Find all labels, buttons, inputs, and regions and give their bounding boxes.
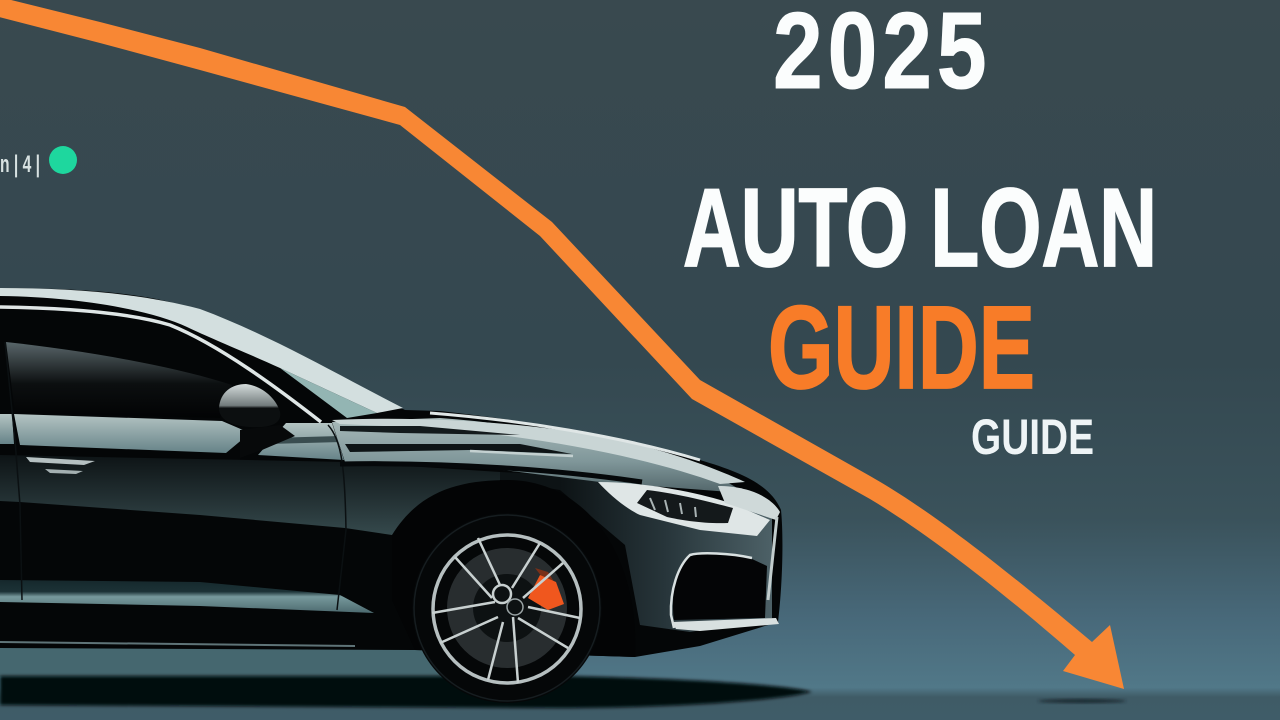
bumper air intake [671,517,779,631]
window chrome line [0,307,321,422]
spokes [432,538,580,683]
headlight [598,482,770,536]
rocker trim line [0,642,355,646]
brake disc [447,548,567,668]
side mirror [219,384,295,458]
hub [493,585,511,603]
front fender highlight [718,486,780,520]
door handle [26,457,95,474]
floor band visible under the car [0,645,440,677]
lower sill reflection [0,580,374,613]
small repeated guide label: GUIDE [971,409,1094,465]
roof highlight [0,288,403,413]
door seams [5,342,346,610]
side window glass [6,342,232,418]
door panel reflection [0,455,500,535]
title: guide in orange: GUIDE [768,282,1035,414]
front fender panel [500,472,772,632]
hood and shoulder reflections [332,413,775,510]
small ticker glyphs and green status dot: n | 4 | [0,151,40,178]
car body silhouette [0,288,782,657]
tire [412,513,602,703]
windshield sliver [280,368,377,418]
belt line reflection panels [14,414,250,453]
alloy rim [433,535,581,683]
small ticker glyphs and green status dot [0,146,77,178]
wheel arch [392,480,635,657]
floor shadow under car [0,676,812,708]
wheel [412,513,602,703]
car illustration [0,288,782,703]
orange brake caliper [528,568,564,610]
